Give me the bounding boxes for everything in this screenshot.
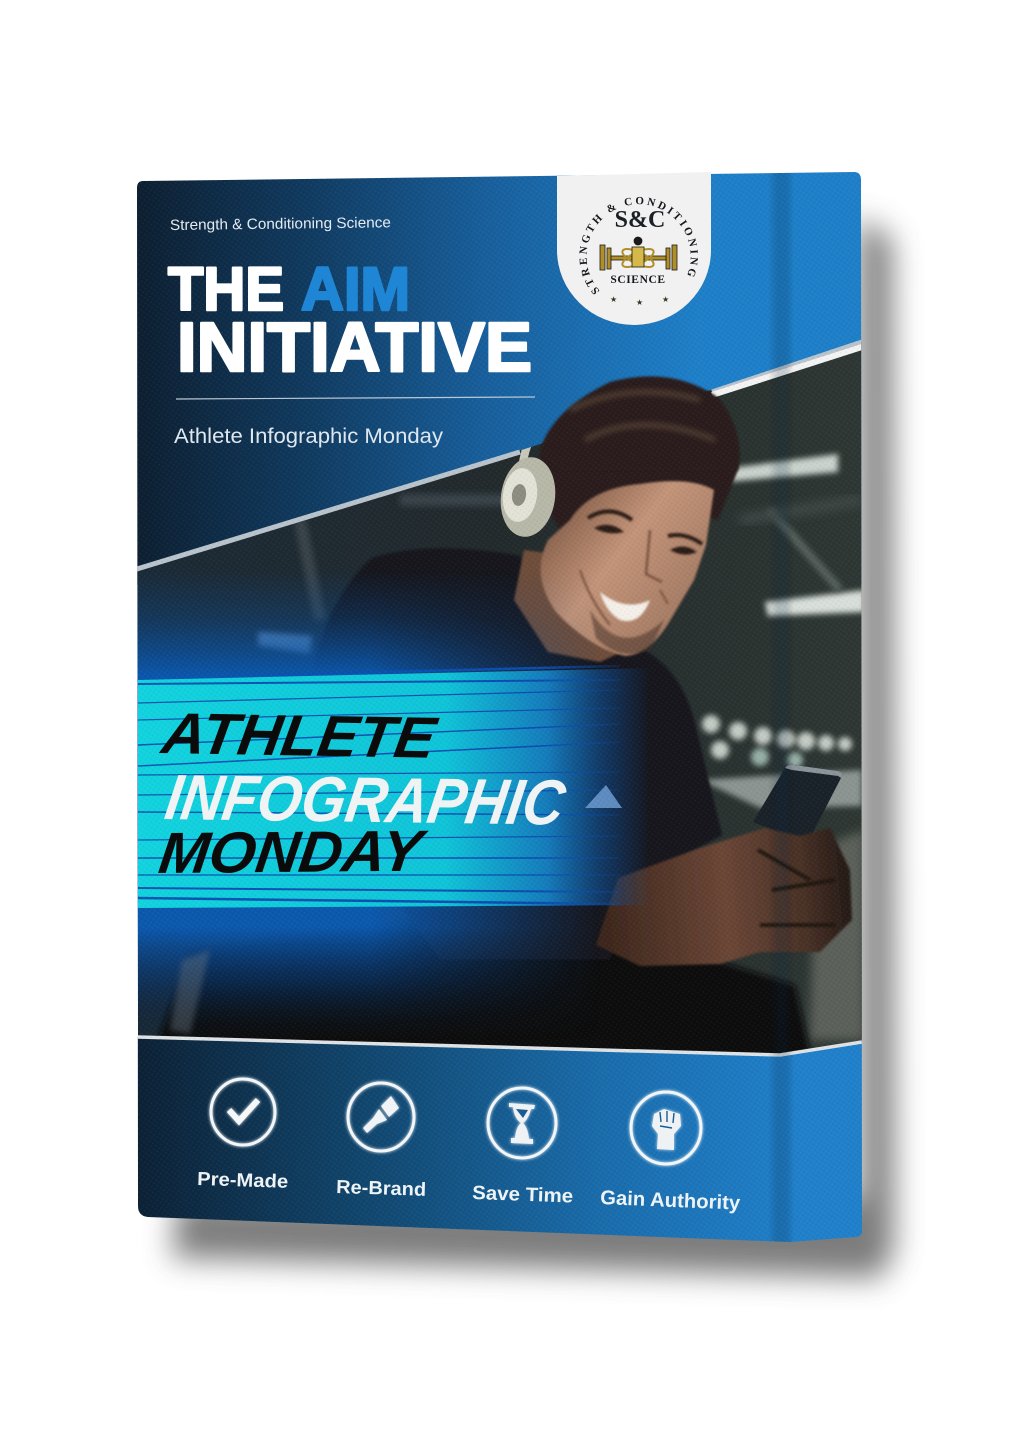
small subtitle: Strength & Conditioning Science xyxy=(170,214,391,234)
benefit: re-brand xyxy=(336,1083,426,1201)
badge shape xyxy=(557,172,711,325)
man: headphones xyxy=(500,446,556,537)
label: Re-Brand xyxy=(336,1177,426,1201)
benefit: pre-made xyxy=(197,1079,288,1193)
panel: gym photo background xyxy=(130,340,870,1060)
product box xyxy=(130,165,870,1250)
benefit: gain authority xyxy=(600,1092,741,1215)
badge barbell icon xyxy=(600,237,677,271)
spine fold shadow xyxy=(770,173,792,1242)
man: facial details xyxy=(580,511,702,654)
icon: check xyxy=(211,1079,275,1145)
label: Save Time xyxy=(472,1182,574,1208)
bottom stripe xyxy=(138,1037,862,1055)
title accent word: AIM xyxy=(301,255,410,323)
headline line two: INFOGRAPHIC xyxy=(161,761,571,838)
box drop shadow xyxy=(172,216,894,1278)
diagonal stripe: top xyxy=(137,342,862,569)
man's hair over the stripe xyxy=(540,376,739,470)
cyan speed band xyxy=(138,666,650,908)
brush headline xyxy=(155,701,571,886)
title line two: INITIATIVE xyxy=(177,308,532,386)
badge science label: SCIENCE xyxy=(610,274,666,286)
headline line one: ATHLETE xyxy=(156,701,442,771)
phone xyxy=(753,765,842,838)
label: Pre-Made xyxy=(197,1169,288,1193)
title line one: THE xyxy=(168,255,284,323)
panel: top header background xyxy=(130,165,870,585)
icon: raised fist xyxy=(631,1092,701,1164)
panel: bottom strip background xyxy=(130,1036,870,1250)
man: hair xyxy=(538,390,740,528)
gym lights and beams xyxy=(300,454,865,1040)
canvas weave texture xyxy=(130,165,870,1250)
badge stars: ★★★ xyxy=(610,295,669,307)
man: torso and shirt xyxy=(300,548,722,960)
man: neck xyxy=(514,550,630,662)
left blue glow over figure xyxy=(137,579,586,1024)
badge monogram: S&C xyxy=(615,207,665,233)
benefit: save time xyxy=(472,1088,574,1208)
man: face xyxy=(541,481,714,656)
man: lower body xyxy=(156,931,812,1054)
label: Gain Authority xyxy=(600,1187,741,1215)
headline line three: MONDAY xyxy=(155,819,431,886)
icon: hourglass xyxy=(488,1088,556,1158)
tagline: Athlete Infographic Monday xyxy=(174,425,444,448)
divider xyxy=(176,397,535,399)
triangle accent xyxy=(585,785,622,808)
man: forearm and hands xyxy=(596,828,852,966)
man: fingers xyxy=(758,850,835,925)
blurred light on left of photo xyxy=(258,632,312,654)
faint legs detail xyxy=(170,950,210,1034)
title xyxy=(168,255,532,386)
hair highlights xyxy=(570,392,715,440)
badge ring text: STRENGTH & CONDITIONING xyxy=(579,196,698,294)
logo badge xyxy=(557,172,711,325)
icon: paint brush xyxy=(348,1083,414,1151)
